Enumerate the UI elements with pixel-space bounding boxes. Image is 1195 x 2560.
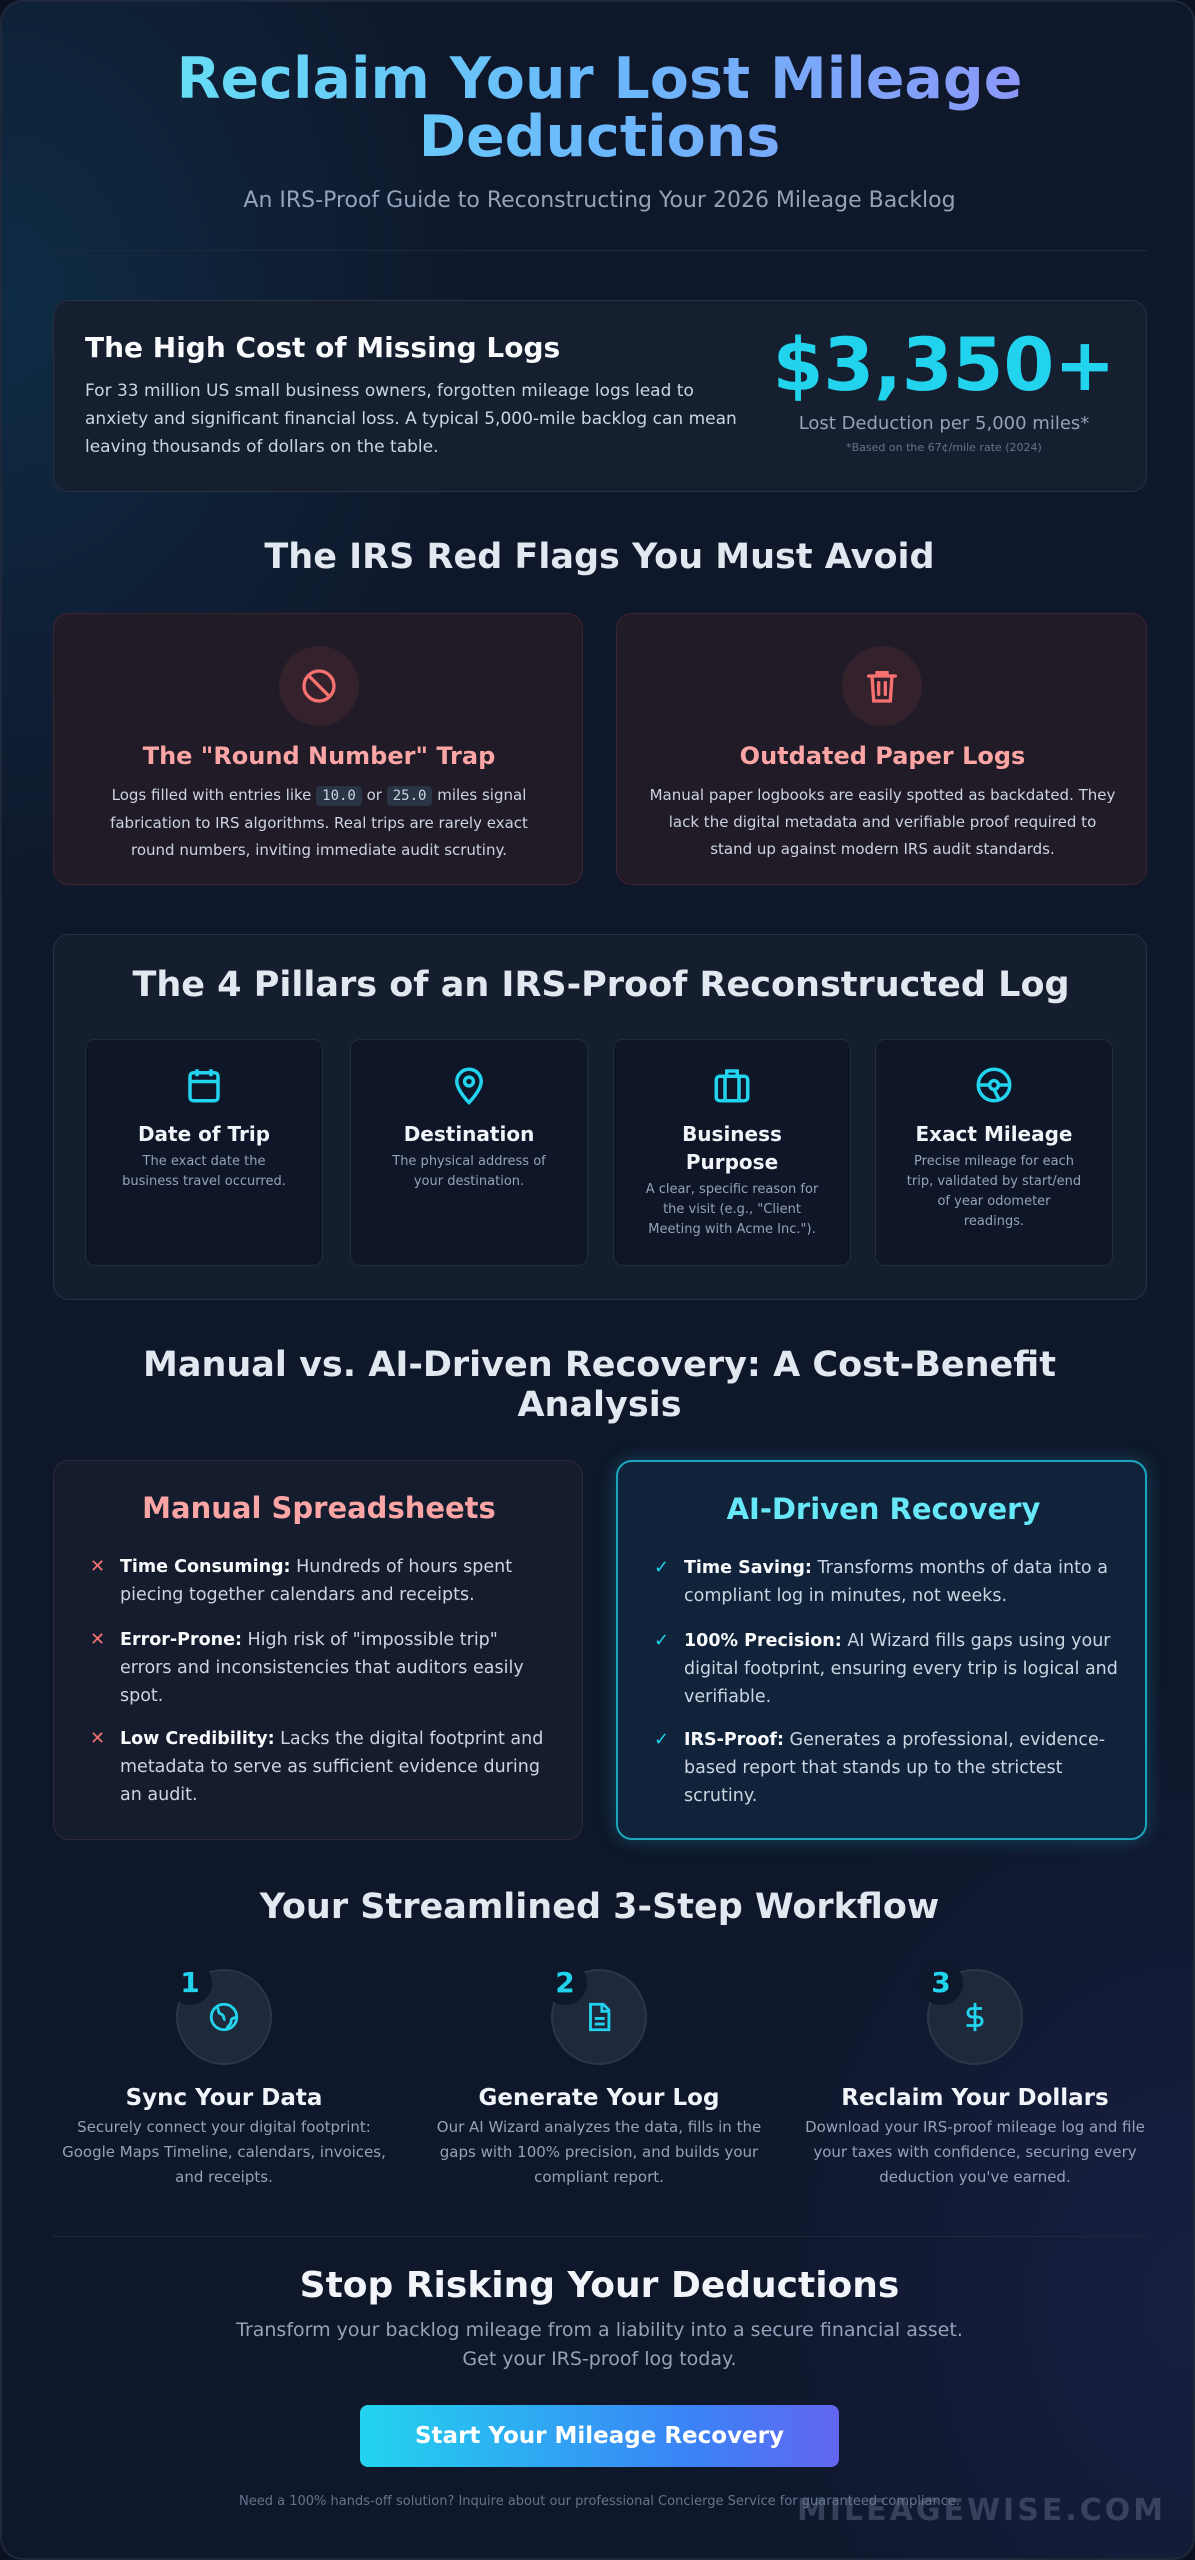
pillar: purpose: A clear, specific reason for the visit (e.g., "Client Meeting with Acme Inc."). <box>646 1182 818 1237</box>
heading: workflow: Your Streamlined 3-Step Workflow <box>260 1887 939 1927</box>
panel: round number trap <box>53 613 583 885</box>
panel: paper logs <box>616 613 1147 885</box>
panel: ai: ✓ <box>654 1557 669 1578</box>
list item: IRS-Proof: Generates a professional, evidence-based report that stands up to the strictest scrutiny. <box>684 1730 1105 1806</box>
step 1: Sync Your Data <box>126 2085 322 2111</box>
step 3: Reclaim Your Dollars <box>841 2085 1109 2111</box>
step 2: Our AI Wizard analyzes the data, fills in the gaps with 100% precision, and builds your compliant report. <box>437 2118 761 2186</box>
panel: high cost <box>53 300 1147 492</box>
stat: $3,350+ <box>773 323 1115 408</box>
list item: Low Credibility: Lacks the digital footprint and metadata to serve as sufficient evidence during an audit. <box>120 1729 543 1805</box>
panel: manual: ✕ <box>90 1556 105 1577</box>
panel: ai <box>616 1460 1147 1840</box>
cta heading: Stop Risking Your Deductions <box>300 2265 899 2306</box>
pillar: purpose <box>613 1039 851 1266</box>
title <box>2 50 1195 166</box>
pillar: purpose: Business <box>682 1122 782 1146</box>
ai title: AI-Driven Recovery <box>727 1492 1040 1526</box>
watermark: MILEAGEWISE.COM <box>797 2493 1166 2528</box>
icon: trash <box>842 646 922 726</box>
step 3: 3 <box>931 1966 951 1999</box>
step 1 <box>62 1966 386 2186</box>
cost text: For 33 million US small business owners, forgotten mileage logs lead to anxiety and significant financial loss. A typical 5,000-mile backlog can mean leaving thousands of dollars on the table. <box>85 381 737 457</box>
pillar: destination <box>350 1039 588 1266</box>
button <box>360 2405 839 2467</box>
flag title: The "Round Number" Trap <box>143 742 495 770</box>
flag title: Outdated Paper Logs <box>740 742 1025 770</box>
cta text: Transform your backlog mileage from a liability into a secure financial asset. <box>236 2319 963 2341</box>
cta text <box>236 2319 963 2370</box>
step 3: Download your IRS-proof mileage log and file your taxes with confidence, securing every deduction you've earned. <box>805 2118 1145 2186</box>
title: Deductions <box>419 104 780 170</box>
heading: manual vs ai <box>143 1345 1056 1425</box>
list item: Error-Prone: High risk of "impossible trip" errors and inconsistencies that auditors easily spot. <box>120 1630 524 1706</box>
step 1: Securely connect your digital footprint: Google Maps Timeline, calendars, invoices, and receipts. <box>62 2118 386 2186</box>
panel: manual <box>53 1460 583 1840</box>
pillars heading: The 4 Pillars of an IRS-Proof Reconstructed Log <box>132 965 1070 1005</box>
stat <box>773 323 1115 454</box>
heading: manual vs ai: Manual vs. AI-Driven Recovery: A Cost-Benefit <box>143 1345 1056 1385</box>
manual title: Manual Spreadsheets <box>142 1491 496 1525</box>
list item: 100% Precision: AI Wizard fills gaps using your digital footprint, ensuring every trip is logical and verifiable. <box>684 1631 1118 1707</box>
heading: red flags: The IRS Red Flags You Must Avoid <box>264 537 935 577</box>
panel: manual: ✕ <box>90 1629 105 1650</box>
step 3 <box>805 1966 1145 2186</box>
subtitle: An IRS-Proof Guide to Reconstructing Your 2026 Mileage Backlog <box>243 188 956 213</box>
list item: Time Saving: Transforms months of data into a compliant log in minutes, not weeks. <box>684 1558 1108 1606</box>
title: Reclaim Your Lost Mileage <box>177 46 1022 112</box>
step 2 <box>437 1966 761 2186</box>
button: Start Your Mileage Recovery <box>415 2423 784 2449</box>
panel: ai: ✓ <box>654 1729 669 1750</box>
pillar: destination: The physical address of your destination. <box>392 1154 546 1189</box>
pillar: mileage <box>875 1039 1113 1266</box>
list item: Time Consuming: Hundreds of hours spent piecing together calendars and receipts. <box>120 1557 512 1605</box>
step 2: Generate Your Log <box>479 2085 719 2111</box>
flag text: Manual paper logbooks are easily spotted as backdated. They lack the digital metadata and verifiable proof required to stand up against modern IRS audit standards. <box>650 786 1115 858</box>
pillar: mileage: Precise mileage for each trip, validated by start/end of year odometer readings. <box>907 1154 1081 1229</box>
step 1: 1 <box>180 1966 200 1999</box>
pillar: date: Date of Trip <box>138 1122 270 1146</box>
pillar: date <box>85 1039 323 1266</box>
panel: ai: ✓ <box>654 1630 669 1651</box>
panel: 4 pillars <box>53 934 1147 1300</box>
pillar: destination: Destination <box>404 1122 534 1146</box>
pillar: purpose: Purpose <box>686 1150 778 1174</box>
cost heading: The High Cost of Missing Logs <box>85 331 560 364</box>
footer note: Need a 100% hands-off solution? Inquire about our professional Concierge Service for guaranteed compliance. <box>239 2494 960 2509</box>
icon: ban <box>279 646 359 726</box>
step 2: 2 <box>555 1966 575 1999</box>
pillar: mileage: Exact Mileage <box>916 1122 1072 1146</box>
panel: manual: ✕ <box>90 1728 105 1749</box>
pillar: date: The exact date the business travel occurred. <box>122 1154 286 1189</box>
stat: *Based on the 67¢/mile rate (2024) <box>846 441 1042 454</box>
stat: Lost Deduction per 5,000 miles* <box>799 413 1089 434</box>
flag text: Logs filled with entries like 10.0 or 25.0 miles signal fabrication to IRS algorithms. Real trips are rarely exact round numbers, inviting immediate audit scrutiny. <box>110 786 528 859</box>
heading: manual vs ai: Analysis <box>517 1385 682 1425</box>
cta text: Get your IRS-proof log today. <box>462 2348 737 2370</box>
